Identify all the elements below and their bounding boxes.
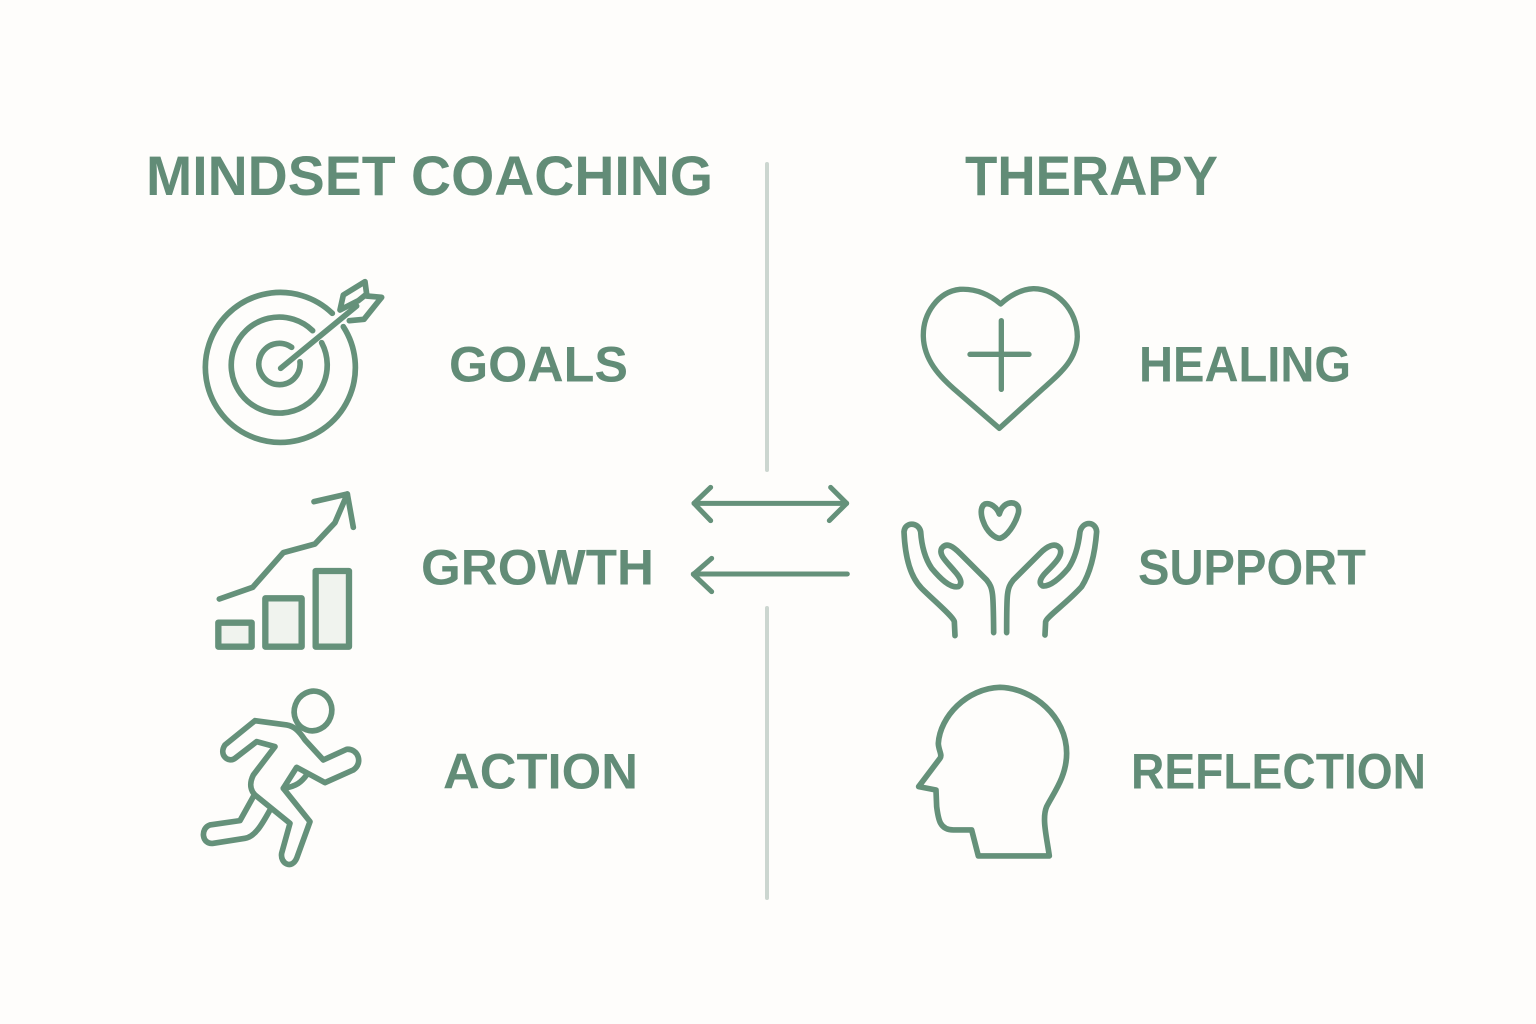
heading: mindset coaching: MINDSET COACHING [146,144,713,207]
divider: lower [765,608,769,898]
heading: therapy: THERAPY [965,144,1218,207]
icon: growth chart [218,494,353,647]
icon: heart with plus [923,289,1077,428]
divider: upper [765,164,769,470]
arrow: double-headed [694,487,847,521]
label: goals: GOALS [449,336,628,392]
icon: head profile [919,687,1067,856]
icon: running person [203,686,359,864]
label: reflection: REFLECTION [1131,744,1426,800]
icon: hands holding heart [904,503,1097,636]
label: healing: HEALING [1139,336,1351,392]
icon: target with arrow [205,282,382,442]
label: action: ACTION [443,744,638,800]
arrow: left-pointing [693,558,847,592]
label: support: SUPPORT [1138,540,1366,596]
label: growth: GROWTH [421,540,654,596]
